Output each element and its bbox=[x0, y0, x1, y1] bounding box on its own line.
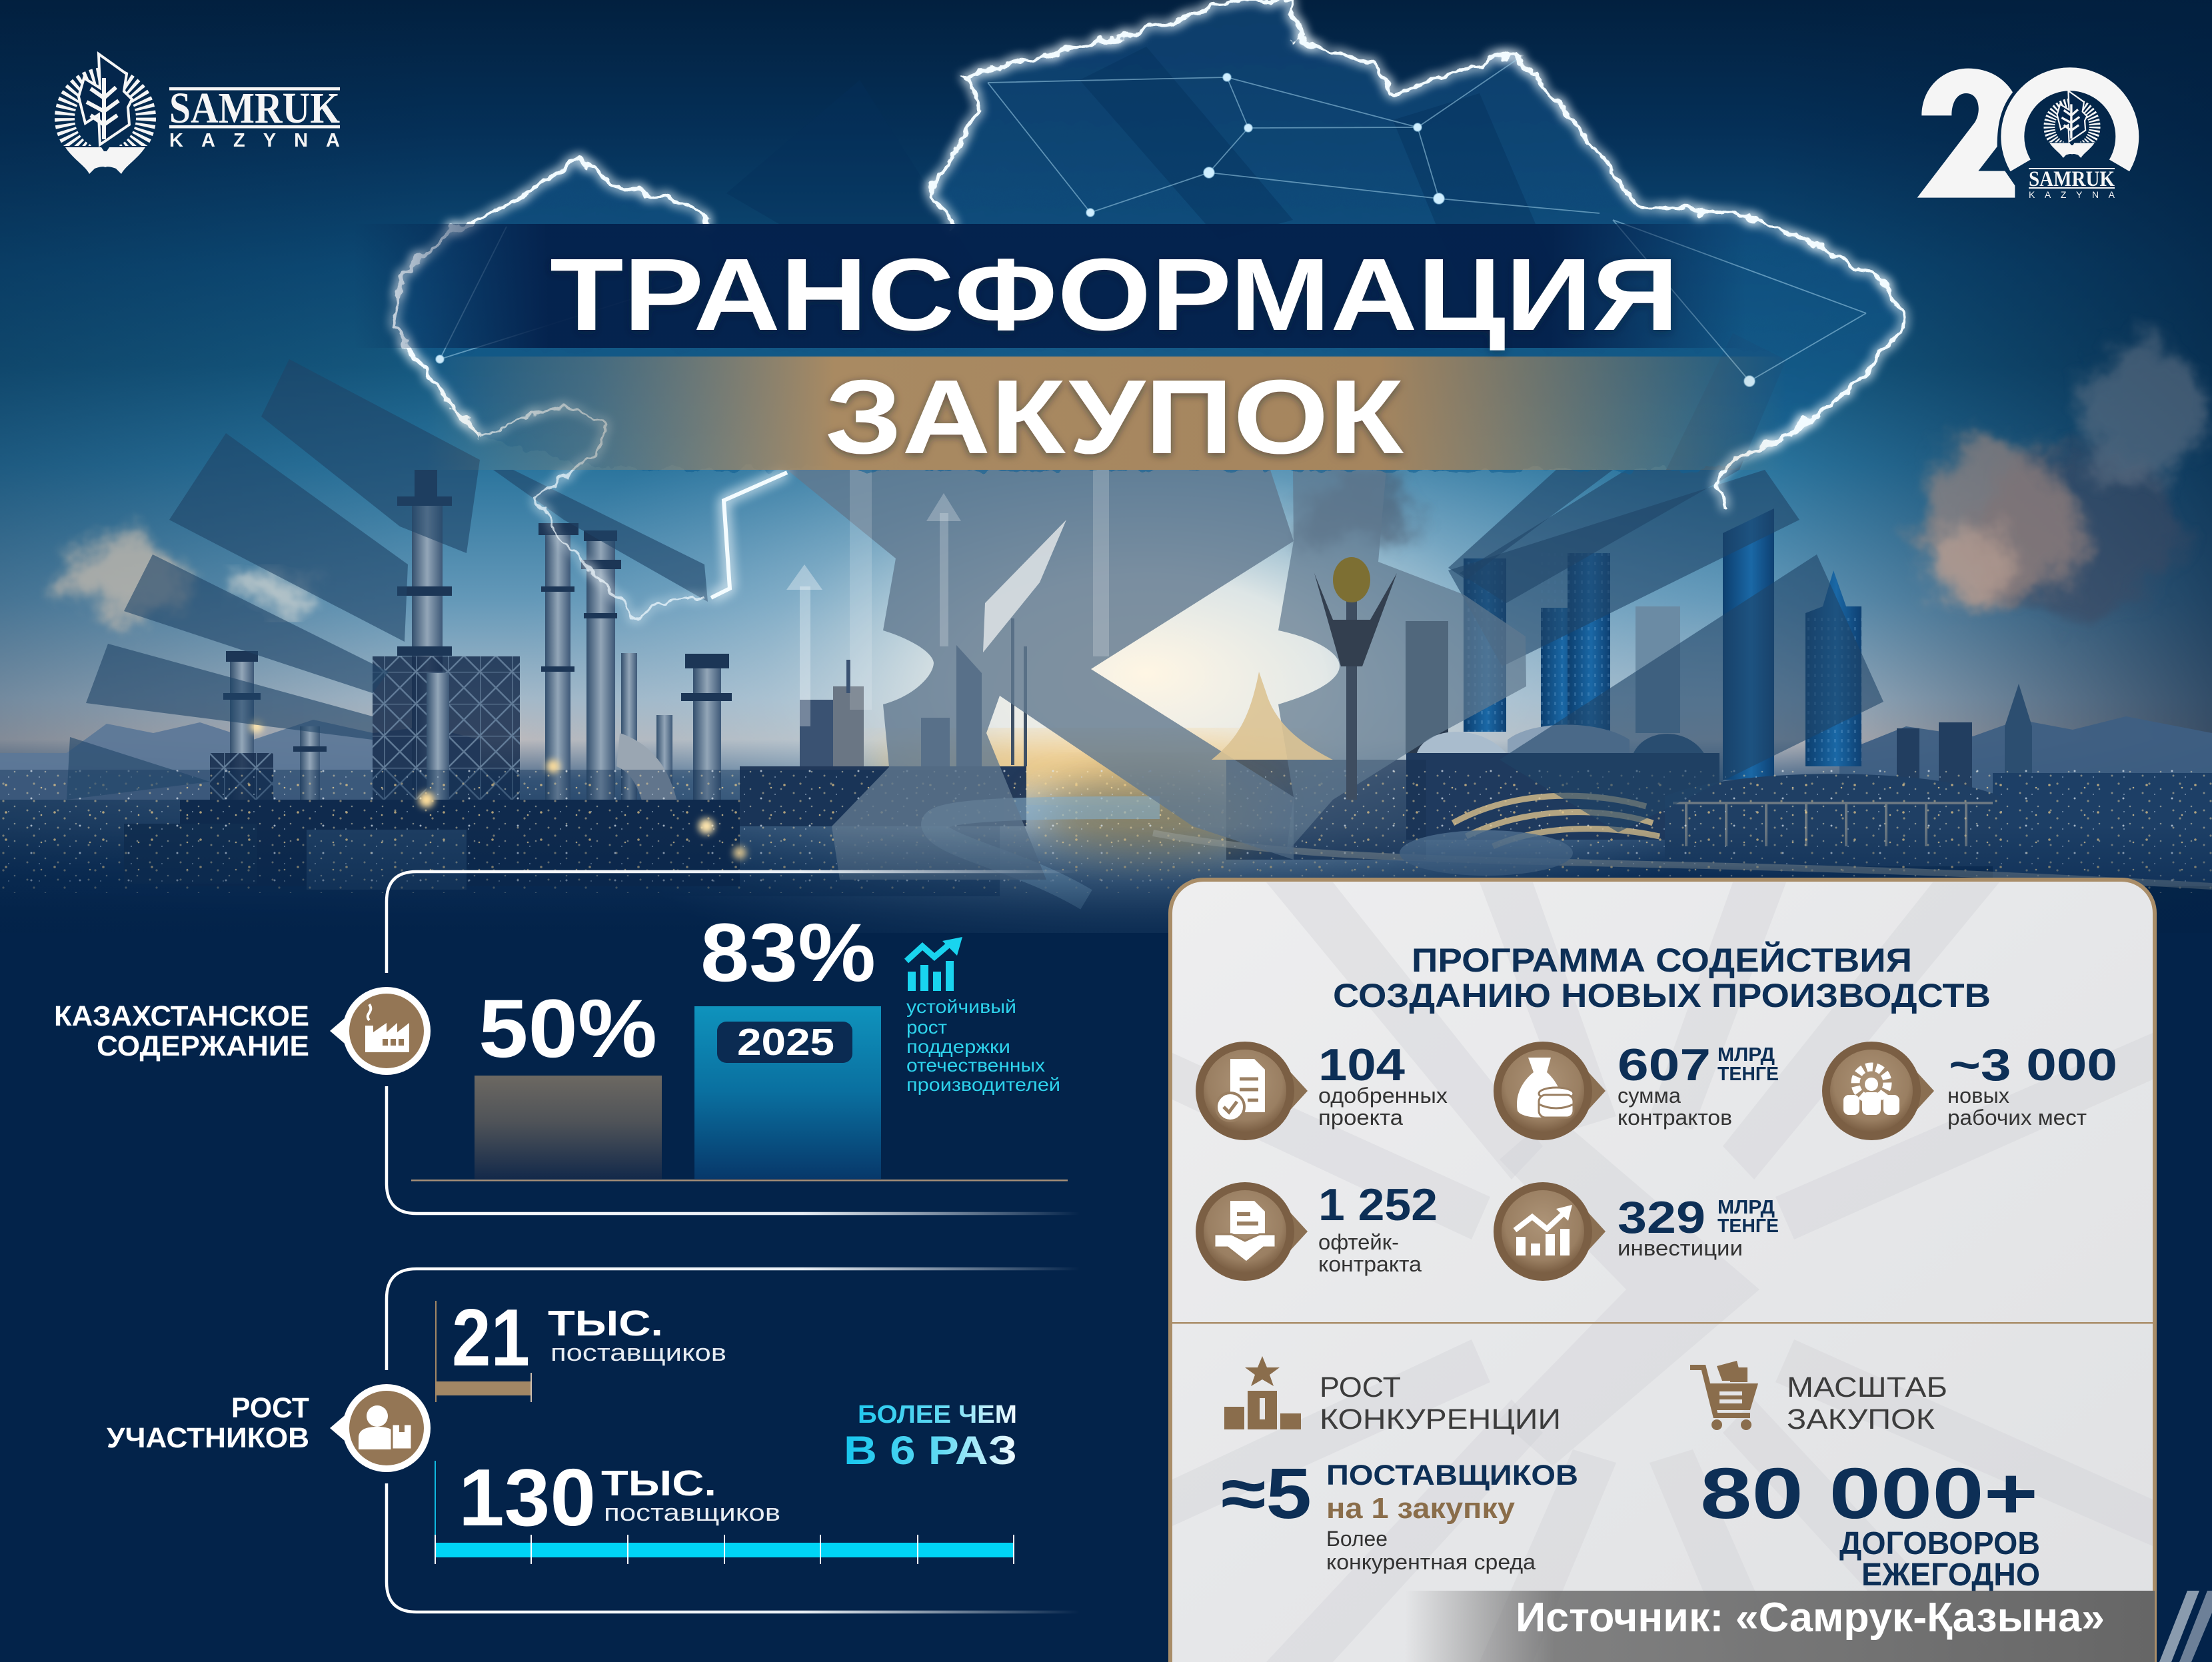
caption: steady growth bbox=[906, 996, 1060, 1095]
stat: 329 billion tenge: инвестиции bbox=[1618, 1236, 1743, 1260]
value 83%: 83% bbox=[700, 907, 876, 999]
value: 21 thousand: поставщиков bbox=[551, 1339, 726, 1366]
icon: document check bbox=[1196, 1042, 1308, 1140]
panel heading bbox=[1333, 941, 1991, 1014]
panel: participants growth frame bbox=[107, 1269, 1080, 1612]
value: 130 thousand: поставщиков bbox=[604, 1499, 780, 1526]
stat: 607 billion tenge bbox=[1618, 1040, 1779, 1130]
panel watermark bbox=[1172, 882, 2153, 1662]
panel: local content frame bbox=[54, 872, 1080, 1214]
stat: 607 billion tenge: сумма bbox=[1618, 1084, 1681, 1108]
value: 21 thousand bbox=[452, 1292, 726, 1383]
glowing lit edge below the banner bbox=[711, 472, 787, 598]
year badge 2025: 2025 bbox=[737, 1021, 834, 1064]
panel heading: ПРОГРАММА СОДЕЙСТВИЯ bbox=[1412, 941, 1912, 979]
Astana skyline bbox=[1040, 508, 2212, 886]
central emblem silhouette bbox=[787, 470, 1526, 880]
icon: shopping cart bbox=[1690, 1361, 1758, 1430]
label: local content: СОДЕРЖАНИЕ bbox=[97, 1030, 309, 1062]
clouds bbox=[63, 340, 2206, 790]
panel: production program bbox=[1170, 880, 2155, 1662]
caption: steady growth: устойчивый bbox=[906, 996, 1016, 1017]
stat: 3000 new jobs: рабочих мест bbox=[1947, 1106, 2087, 1130]
stat: 3000 new jobs: новых bbox=[1947, 1084, 2009, 1108]
value 50%: 50% bbox=[479, 983, 657, 1075]
heading: procurement scale: ЗАКУПОК bbox=[1787, 1403, 1935, 1435]
icon: money bag bbox=[1494, 1042, 1606, 1140]
logo: 20 years: SAMRUK bbox=[2029, 167, 2115, 191]
heading: competition growth: РОСТ bbox=[1320, 1371, 1401, 1403]
stat: 607 billion tenge: ТЕНГЕ bbox=[1717, 1064, 1779, 1085]
stat: 607 billion tenge: МЛРД bbox=[1717, 1044, 1775, 1066]
stat: 80000 contracts bbox=[1700, 1453, 2040, 1593]
landmark: Khan Shatyr tent bbox=[1212, 672, 1333, 760]
caption: steady growth: рост bbox=[906, 1017, 947, 1038]
dark stripes inside the map bbox=[726, 47, 1560, 347]
stat: 104 projects: 104 bbox=[1318, 1040, 1405, 1090]
stat: 5 suppliers per tender: ПОСТАВЩИКОВ bbox=[1326, 1459, 1578, 1491]
heading: procurement scale: МАСШТАБ bbox=[1787, 1371, 1947, 1403]
caption: steady growth: поддержки bbox=[906, 1036, 1010, 1057]
icon: supplier bbox=[330, 1384, 431, 1472]
stat: 5 suppliers per tender bbox=[1221, 1453, 1578, 1574]
stat: 1252 offtake contracts: контракта bbox=[1318, 1252, 1422, 1276]
mid city towers behind the refinery bbox=[740, 618, 1027, 826]
value: 21 thousand: 21 bbox=[452, 1292, 530, 1383]
map fill of Kazakhstan bbox=[392, 0, 1905, 470]
label: participants growth: РОСТ bbox=[231, 1392, 309, 1424]
bar: 83 percent bbox=[694, 1006, 881, 1179]
faint growth arrows and light columns bbox=[786, 470, 1109, 726]
logo: Samruk Kazyna bbox=[65, 54, 340, 174]
stat: 104 projects bbox=[1318, 1040, 1448, 1130]
glowing map outline bbox=[392, 0, 1905, 618]
title banner: dark strip bbox=[353, 224, 1746, 348]
title banner: gold strip bbox=[427, 357, 1786, 470]
stat: 1252 offtake contracts: 1 252 bbox=[1318, 1180, 1438, 1230]
heading: procurement scale bbox=[1787, 1371, 1947, 1435]
value: 130 thousand bbox=[459, 1452, 780, 1543]
year badge 2025 bbox=[717, 1021, 852, 1064]
value: 21 thousand: ТЫС. bbox=[548, 1303, 663, 1343]
title line 2: ЗАКУПОК bbox=[825, 359, 1404, 476]
icon: gear and people bbox=[1822, 1042, 1934, 1140]
logo: 20 years: KAZYNA bbox=[2029, 189, 2115, 200]
label: local content: КАЗАХСТАНСКОЕ bbox=[54, 1000, 309, 1032]
stat: 104 projects: проекта bbox=[1318, 1106, 1403, 1130]
emblem watermark bands over the sky bbox=[67, 333, 1883, 832]
bar: 130 thousand bbox=[435, 1461, 1014, 1564]
caption: steady growth: отечественных bbox=[906, 1055, 1045, 1076]
heading: competition growth bbox=[1320, 1371, 1561, 1435]
stat: 80000 contracts: ЕЖЕГОДНО bbox=[1861, 1557, 2040, 1593]
heading: competition growth: КОНКУРЕНЦИИ bbox=[1320, 1403, 1561, 1435]
bar: 50 percent bbox=[475, 1076, 662, 1179]
caption: steady growth: производителей bbox=[906, 1074, 1060, 1095]
chart baseline bbox=[411, 1180, 1068, 1181]
icon: handshake contract bbox=[1196, 1182, 1308, 1281]
stat: 329 billion tenge bbox=[1618, 1192, 1779, 1260]
callout: more than 6 times bbox=[844, 1401, 1017, 1473]
map network lines and nodes bbox=[436, 60, 1866, 387]
panel heading: СОЗДАНИЮ НОВЫХ ПРОИЗВОДСТВ bbox=[1333, 977, 1991, 1014]
label: local content bbox=[54, 1000, 309, 1062]
logo: Samruk Kazyna: SAMRUK bbox=[169, 84, 340, 133]
refinery silhouette bbox=[124, 470, 740, 890]
stat: 1252 offtake contracts: офтейк- bbox=[1318, 1230, 1399, 1254]
source strip: Источник: «Самрук-Қазына» bbox=[1516, 1595, 2105, 1641]
stat: 80000 contracts: 80 000+ bbox=[1700, 1453, 2038, 1533]
stat: 1252 offtake contracts bbox=[1318, 1180, 1438, 1276]
stat: 5 suppliers per tender: Более bbox=[1326, 1527, 1388, 1551]
mountains on the horizon bbox=[0, 716, 2212, 800]
stat: 3000 new jobs bbox=[1947, 1040, 2117, 1130]
stat: 5 suppliers per tender: конкурентная среда bbox=[1326, 1550, 1536, 1574]
label: participants growth: УЧАСТНИКОВ bbox=[107, 1422, 309, 1454]
stat: 607 billion tenge: 607 bbox=[1618, 1040, 1711, 1090]
city lights and roads bbox=[0, 720, 2212, 900]
stat: 104 projects: одобренных bbox=[1318, 1084, 1448, 1108]
value: 130 thousand: ТЫС. bbox=[601, 1463, 716, 1503]
logo: Samruk Kazyna: KAZYNA bbox=[169, 130, 340, 151]
value: 130 thousand: 130 bbox=[459, 1452, 596, 1543]
source strip bbox=[1405, 1591, 2212, 1662]
label: participants growth bbox=[107, 1392, 309, 1454]
stat: 607 billion tenge: контрактов bbox=[1618, 1106, 1732, 1130]
title line 1: ТРАНСФОРМАЦИЯ bbox=[550, 237, 1679, 352]
icon: investment chart bbox=[1494, 1182, 1606, 1281]
stat: 5 suppliers per tender: ≈5 bbox=[1221, 1453, 1312, 1533]
stat: 3000 new jobs: ~3 000 bbox=[1949, 1040, 2117, 1090]
stat: 329 billion tenge: МЛРД bbox=[1717, 1197, 1775, 1218]
bar: 21 thousand bbox=[435, 1301, 532, 1402]
stat: 329 billion tenge: 329 bbox=[1618, 1192, 1705, 1243]
callout: more than 6 times: В 6 РАЗ bbox=[844, 1428, 1017, 1473]
logo: 20 years bbox=[1917, 69, 2127, 200]
callout: more than 6 times: БОЛЕЕ ЧЕМ bbox=[858, 1401, 1017, 1429]
icon: growth chart bbox=[906, 937, 962, 991]
icon: podium and star bbox=[1224, 1356, 1301, 1429]
stat: 5 suppliers per tender: на 1 закупку bbox=[1326, 1492, 1516, 1525]
stat: 80000 contracts: ДОГОВОРОВ bbox=[1839, 1526, 2040, 1561]
stat: 329 billion tenge: ТЕНГЕ bbox=[1717, 1216, 1779, 1237]
fade from photo into navy bbox=[0, 826, 2212, 986]
icon: factory bbox=[330, 987, 431, 1075]
landmark: Bayterek tower bbox=[1314, 557, 1397, 800]
